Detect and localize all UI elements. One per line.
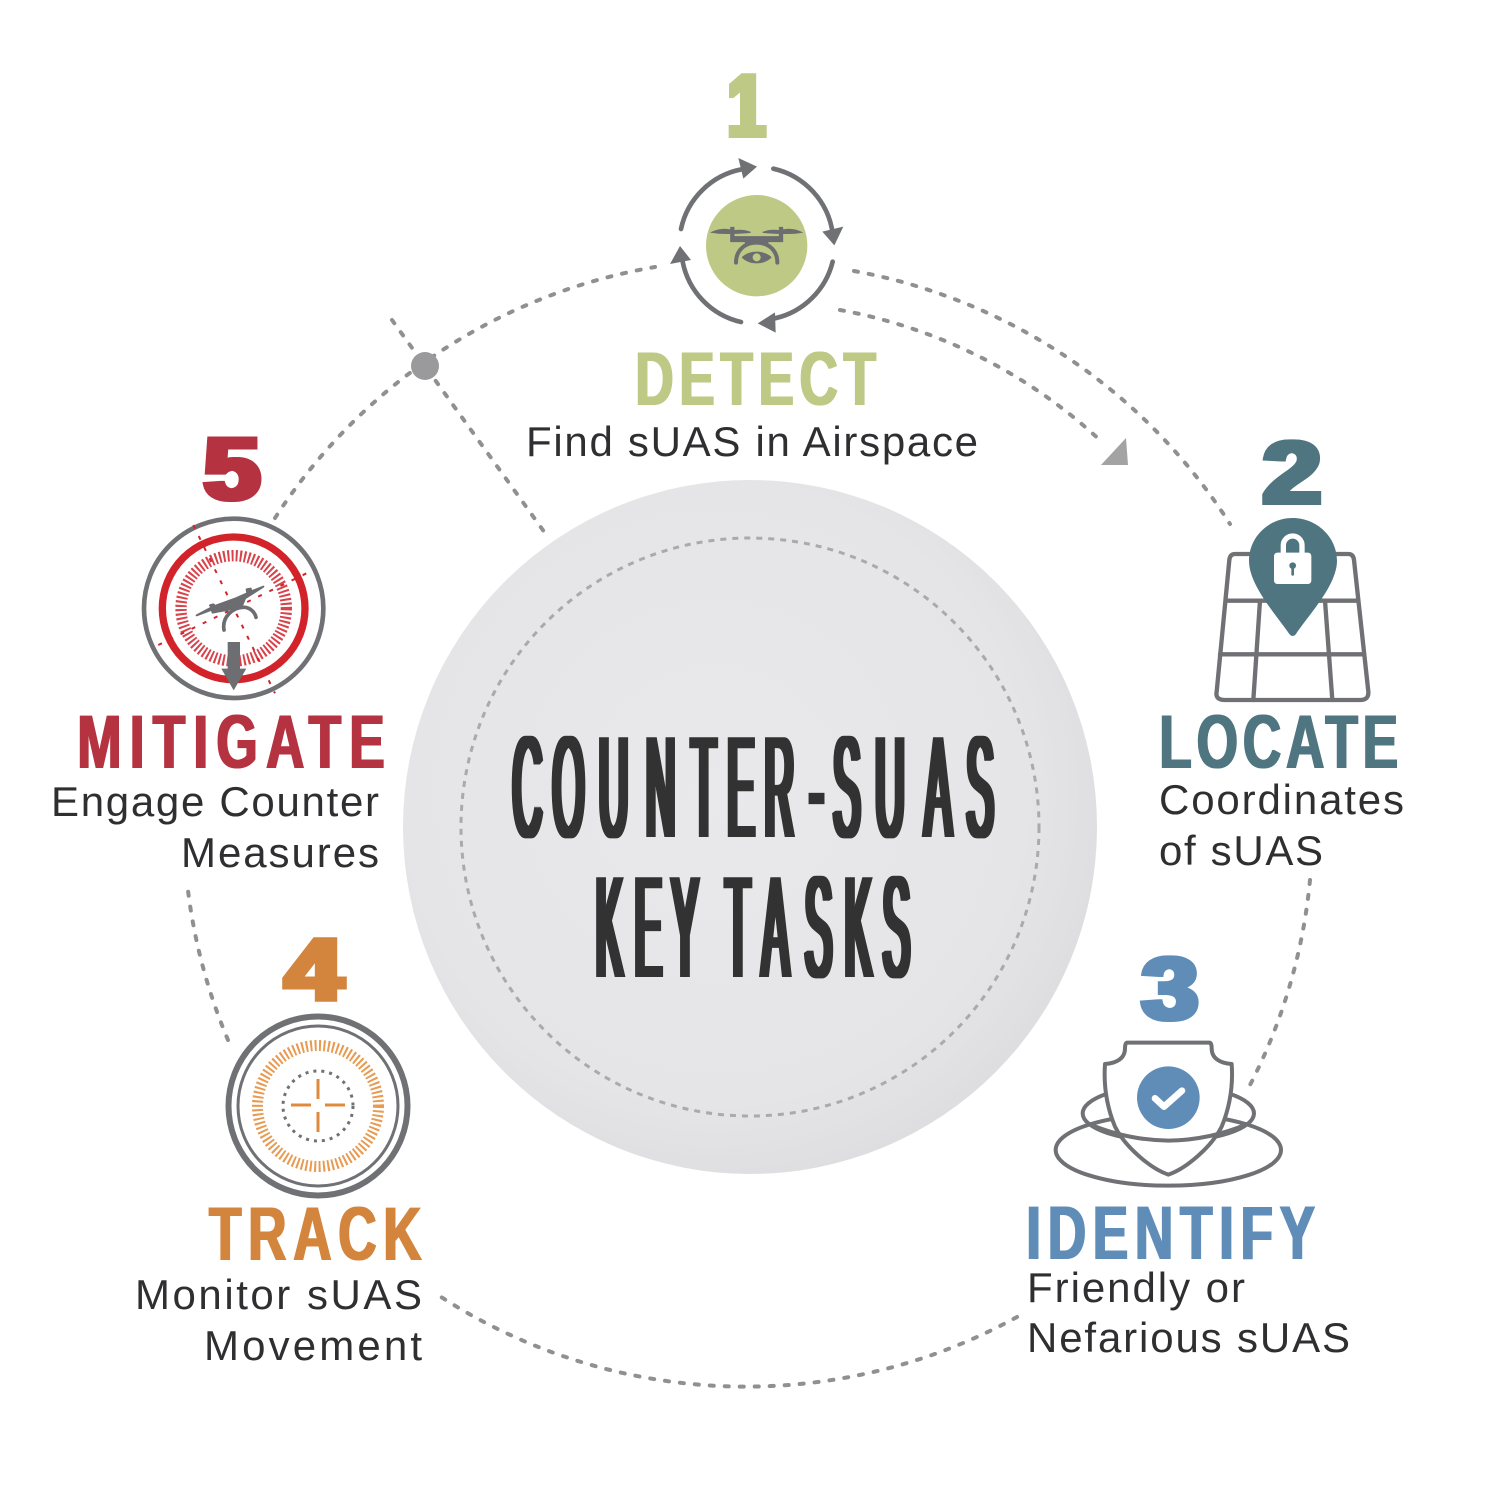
description: Engage Counter <box>51 778 379 825</box>
heading: IDENTIFY <box>1026 1191 1322 1275</box>
icon: tracking reticle <box>228 1016 408 1196</box>
number 1: 1 <box>728 56 765 155</box>
junction dot <box>411 352 439 380</box>
description: Coordinates <box>1159 776 1404 823</box>
number 3: 3 <box>1142 939 1198 1038</box>
description: of sUAS <box>1159 827 1323 874</box>
title: KEY TASKS <box>596 846 910 1008</box>
panel: identify <box>1026 939 1350 1361</box>
description <box>135 1271 422 1369</box>
icon: shield with check <box>1056 1043 1281 1186</box>
description <box>1027 1264 1350 1361</box>
icon: mitigation target with drone <box>144 519 323 698</box>
heading: MITIGATE <box>77 700 393 784</box>
description: Movement <box>204 1322 422 1369</box>
description: Find sUAS in Airspace <box>526 418 978 465</box>
panel: track <box>135 920 428 1369</box>
description: Friendly or <box>1027 1264 1245 1311</box>
description: Monitor sUAS <box>135 1271 422 1318</box>
number 2: 2 <box>1263 423 1321 522</box>
description: Measures <box>181 829 379 876</box>
description <box>51 778 379 876</box>
heading: LOCATE <box>1159 700 1403 784</box>
number 5: 5 <box>204 419 260 518</box>
central circle <box>403 480 1097 1174</box>
dashed cycle path <box>187 267 1310 1387</box>
arrowhead: cycle direction <box>1101 438 1128 465</box>
title: COUNTER-SUAS <box>513 706 994 868</box>
panel: locate <box>1159 423 1404 874</box>
number 4: 4 <box>285 920 343 1019</box>
icon: map pin with lock <box>1216 518 1368 700</box>
description: Nefarious sUAS <box>1027 1314 1350 1361</box>
panel: mitigate <box>51 419 393 876</box>
description <box>1159 776 1404 874</box>
heading: DETECT <box>635 337 882 421</box>
title <box>513 706 994 1008</box>
icon: drone with circular arrows <box>670 158 843 333</box>
panel: detect <box>526 56 978 465</box>
heading: TRACK <box>209 1192 428 1276</box>
